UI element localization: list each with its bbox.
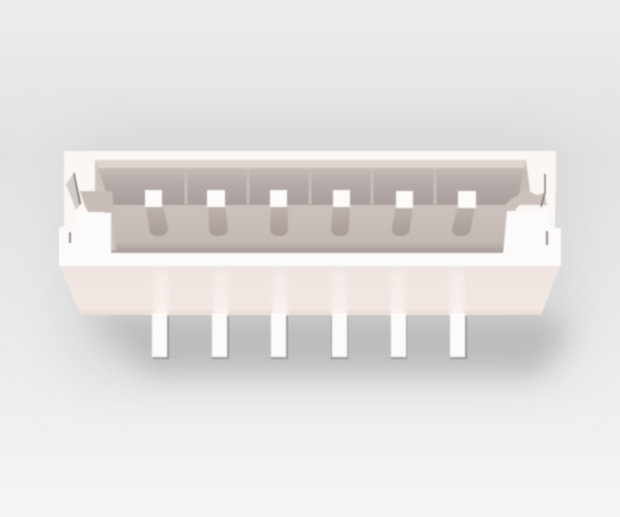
rib lines [186, 169, 435, 204]
solder tails (bottom) [152, 313, 467, 359]
pin streaks on front wall [154, 272, 464, 314]
front rim [59, 253, 561, 266]
pin tips (top) [145, 190, 476, 208]
connector housing [59, 151, 561, 315]
right latch [503, 151, 561, 256]
pin shafts inside cavity [146, 206, 475, 236]
outer top rim [59, 151, 561, 266]
cavity floor [107, 205, 517, 253]
right cavity wall [503, 160, 530, 252]
cavity back wall [95, 160, 526, 205]
front wall [60, 266, 560, 315]
soft shadow [70, 135, 570, 375]
left cavity wall [92, 160, 116, 252]
left latch [59, 151, 114, 254]
